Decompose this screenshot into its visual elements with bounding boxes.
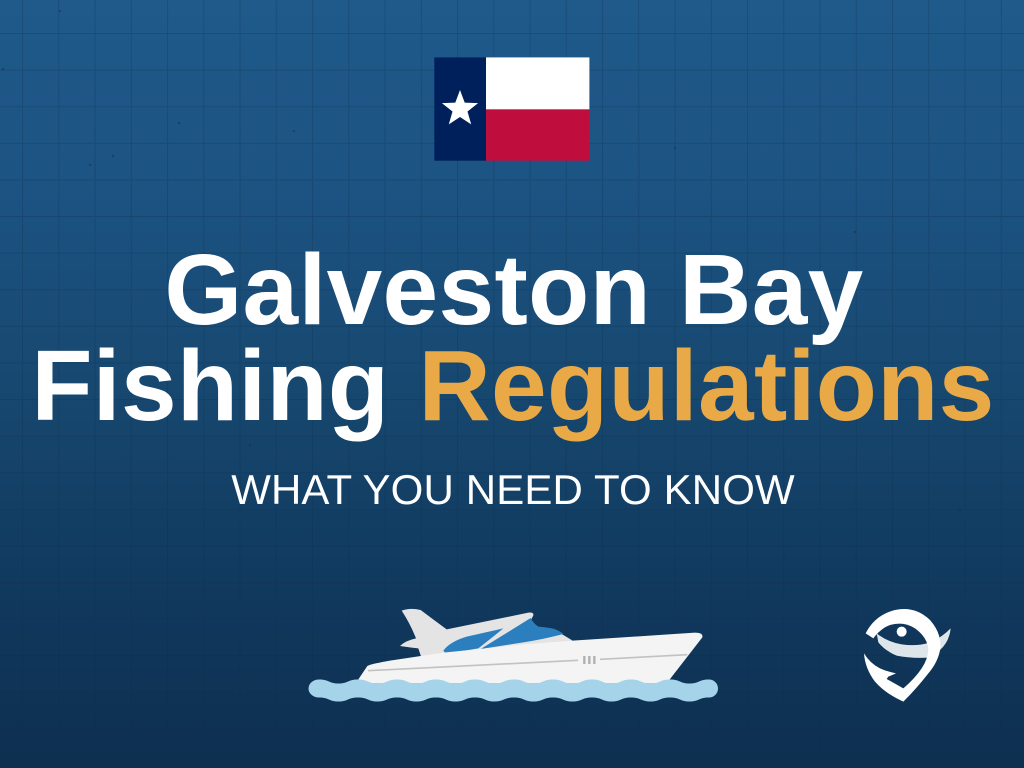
boat hull [356,633,702,683]
fish tail band [877,628,951,658]
title: Galveston Bay: Galveston Bay [164,234,864,346]
fish eye [897,627,907,637]
fish body ring [864,609,940,702]
flag red stripe [486,109,589,161]
boat cabin [400,609,573,658]
boat windows [443,628,503,653]
hull vents [584,656,594,664]
subtitle: WHAT YOU NEED TO KNOW [231,466,795,513]
title: Fishing Regulations: Fishing Regulations [31,330,995,442]
hull stripe [368,655,687,671]
flag blue stripe [434,57,486,161]
water waves [308,680,718,702]
flag white stripe [486,57,589,109]
flag star [442,90,478,124]
